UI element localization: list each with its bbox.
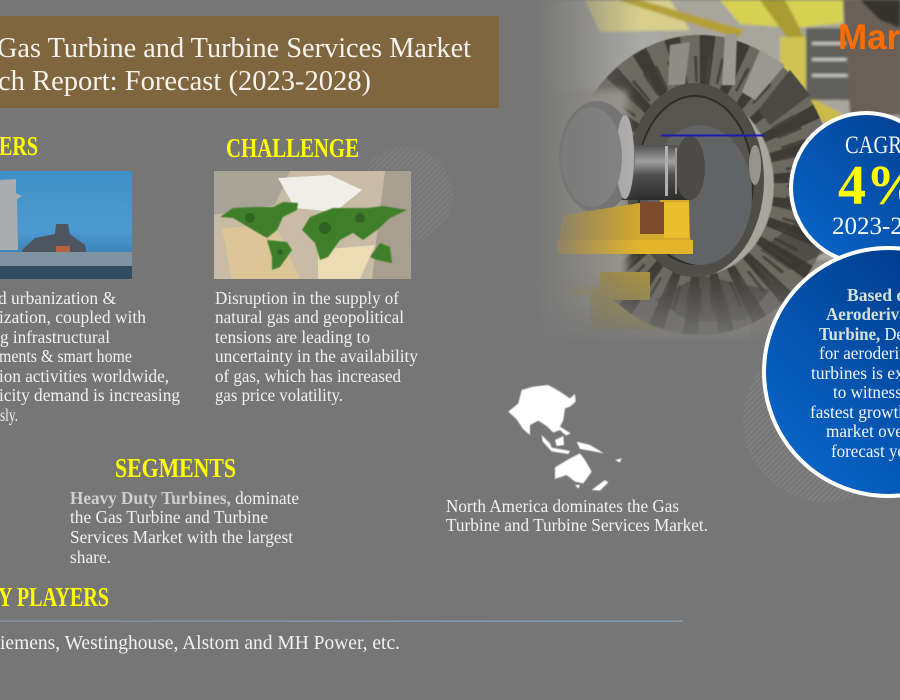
challenge text: uncertainty in the availability — [215, 346, 418, 366]
turbine shaft and flange — [559, 101, 705, 213]
title text: Gas Turbine and Turbine Services Market — [0, 32, 471, 64]
challenge image: green world map — [214, 171, 411, 279]
drivers heading: ERS — [0, 131, 38, 161]
drivers text: ments & smart home — [0, 346, 132, 366]
challenge text: Disruption in the supply of — [215, 288, 399, 308]
segments text: the Gas Turbine and Turbine — [70, 507, 268, 527]
key players text: iemens, Westinghouse, Alstom and MH Power, etc. — [0, 632, 400, 654]
drivers text: icity demand is increasing — [0, 385, 180, 405]
panel: challenge — [214, 133, 418, 405]
challenge text: of gas, which has increased — [215, 366, 401, 386]
turbine disc — [626, 83, 764, 277]
regional text: Turbine and Turbine Services Market. — [446, 515, 708, 535]
drivers text: g infrastructural — [0, 327, 110, 347]
key players heading: Y PLAYERS — [0, 582, 109, 612]
blue marker line — [661, 134, 764, 136]
divider rule — [0, 620, 683, 622]
segments text: Heavy Duty Turbines, dominate — [70, 488, 299, 508]
challenge text: gas price volatility. — [215, 385, 343, 405]
drivers text: sly. — [0, 405, 18, 425]
decorative hatched circle near challenge — [357, 147, 453, 243]
panel: key players — [0, 582, 683, 654]
title text — [0, 32, 471, 97]
icon: Asia-Pacific white map — [508, 385, 622, 491]
panel: drivers — [0, 131, 180, 425]
challenge text: natural gas and geopolitical — [215, 307, 404, 327]
title text: ch Report: Forecast (2023-2028) — [0, 65, 371, 97]
segments heading: SEGMENTS — [115, 453, 236, 483]
drivers text: ization, coupled with — [0, 307, 146, 327]
segments text — [70, 488, 299, 567]
callout: aeroderivative segment — [764, 248, 900, 496]
callout: CAGR — [791, 113, 900, 263]
photo backdrop — [520, 0, 900, 340]
challenge heading: CHALLENGE — [226, 133, 359, 163]
photo fade to grey — [470, 0, 640, 350]
drivers image: power plant — [0, 171, 132, 279]
title banner — [0, 16, 499, 108]
challenge text — [215, 288, 418, 405]
drivers text: ion activities worldwide, — [0, 366, 169, 386]
yellow bearing stand — [557, 200, 693, 300]
panel: segments — [70, 453, 299, 567]
regional text — [446, 496, 708, 535]
challenge text: tensions are leading to — [215, 327, 370, 347]
drivers text: d urbanization & — [0, 288, 116, 308]
segments text: share. — [70, 547, 111, 567]
backdrop patch left of the rotor — [520, 90, 627, 290]
segments text: Services Market with the largest — [70, 527, 293, 547]
photo: turbine rotor in workshop — [470, 0, 900, 375]
drivers text — [0, 288, 180, 425]
panel: regional — [446, 385, 708, 535]
regional text: North America dominates the Gas — [446, 496, 679, 516]
decorative hatched circle near segment callout — [743, 338, 900, 502]
turbine blades — [596, 33, 830, 322]
